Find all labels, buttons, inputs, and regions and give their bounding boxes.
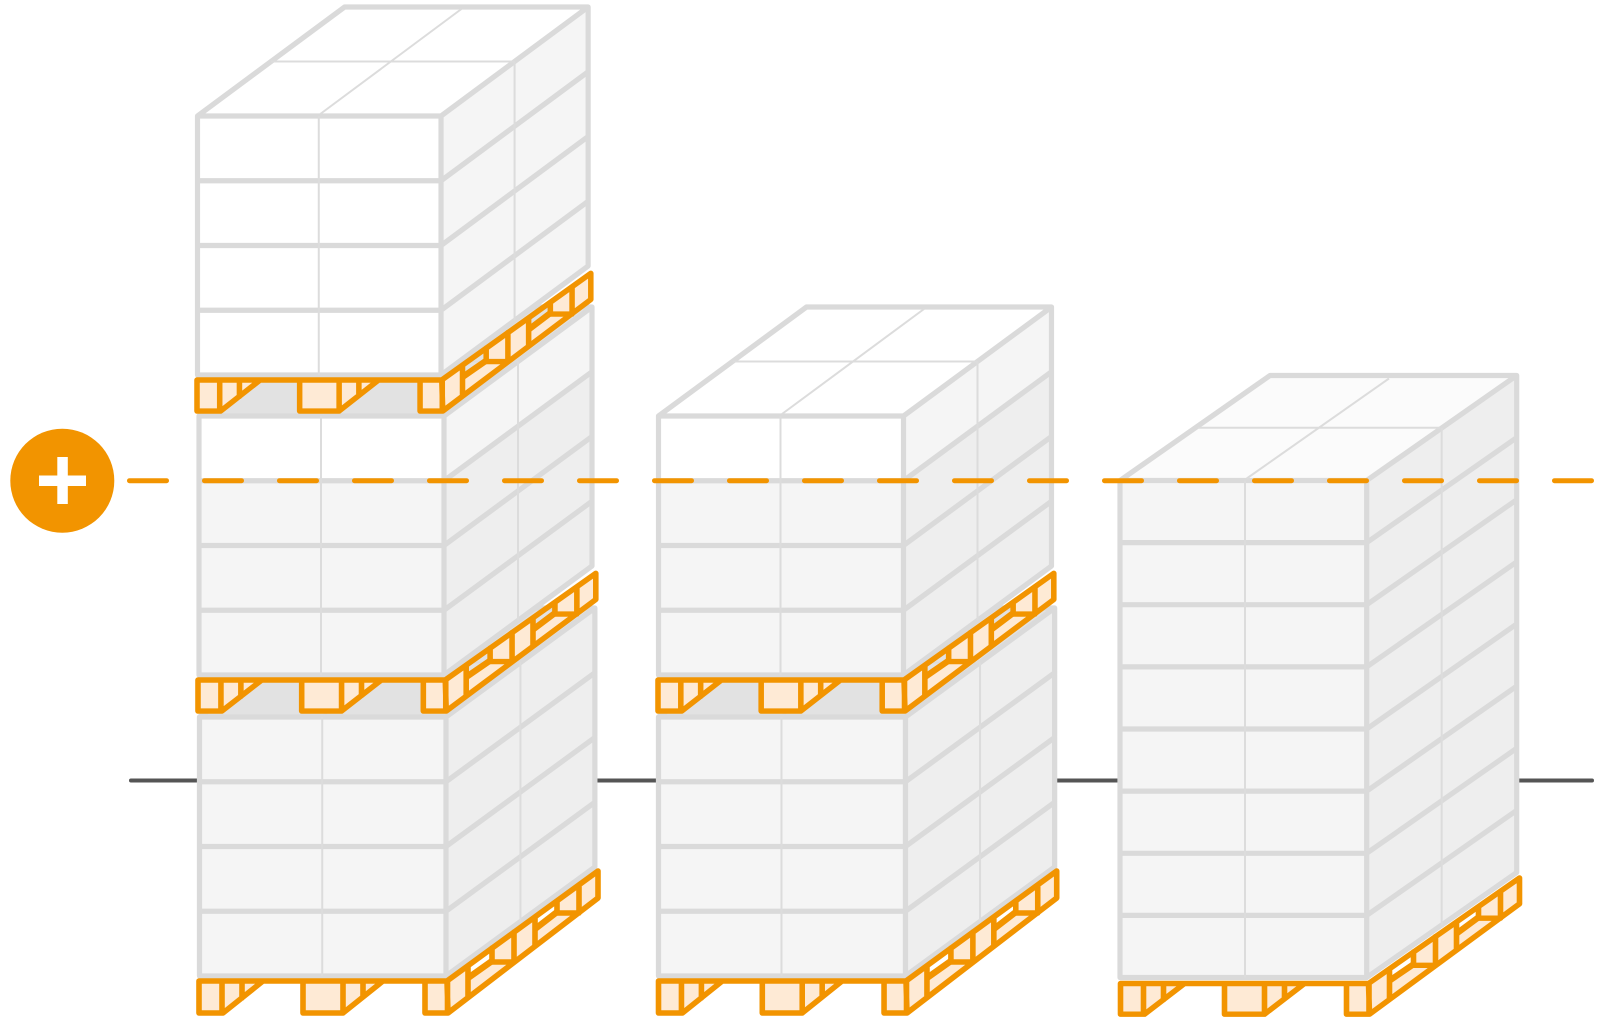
top load unit (198, 7, 588, 375)
tall unit pallet (1120, 878, 1520, 1014)
stack 1: three stacked pallets (197, 7, 598, 1013)
bottom pallet (199, 871, 598, 1013)
icon: plus badge (10, 429, 114, 533)
lower load unit (658, 608, 1055, 976)
tall load unit (1120, 376, 1517, 978)
stack 2: two stacked pallets (658, 307, 1057, 1013)
lower pallet (658, 871, 1057, 1013)
upper load unit (658, 307, 1052, 675)
middle pallet (198, 573, 596, 711)
stack 3: single tall pallet (1120, 376, 1520, 1014)
middle load unit (199, 307, 592, 675)
ground reference line (131, 778, 1592, 782)
top pallet (197, 273, 591, 411)
upper pallet (658, 573, 1054, 711)
dashed height limit line (130, 478, 1592, 483)
bottom load unit (200, 608, 595, 976)
